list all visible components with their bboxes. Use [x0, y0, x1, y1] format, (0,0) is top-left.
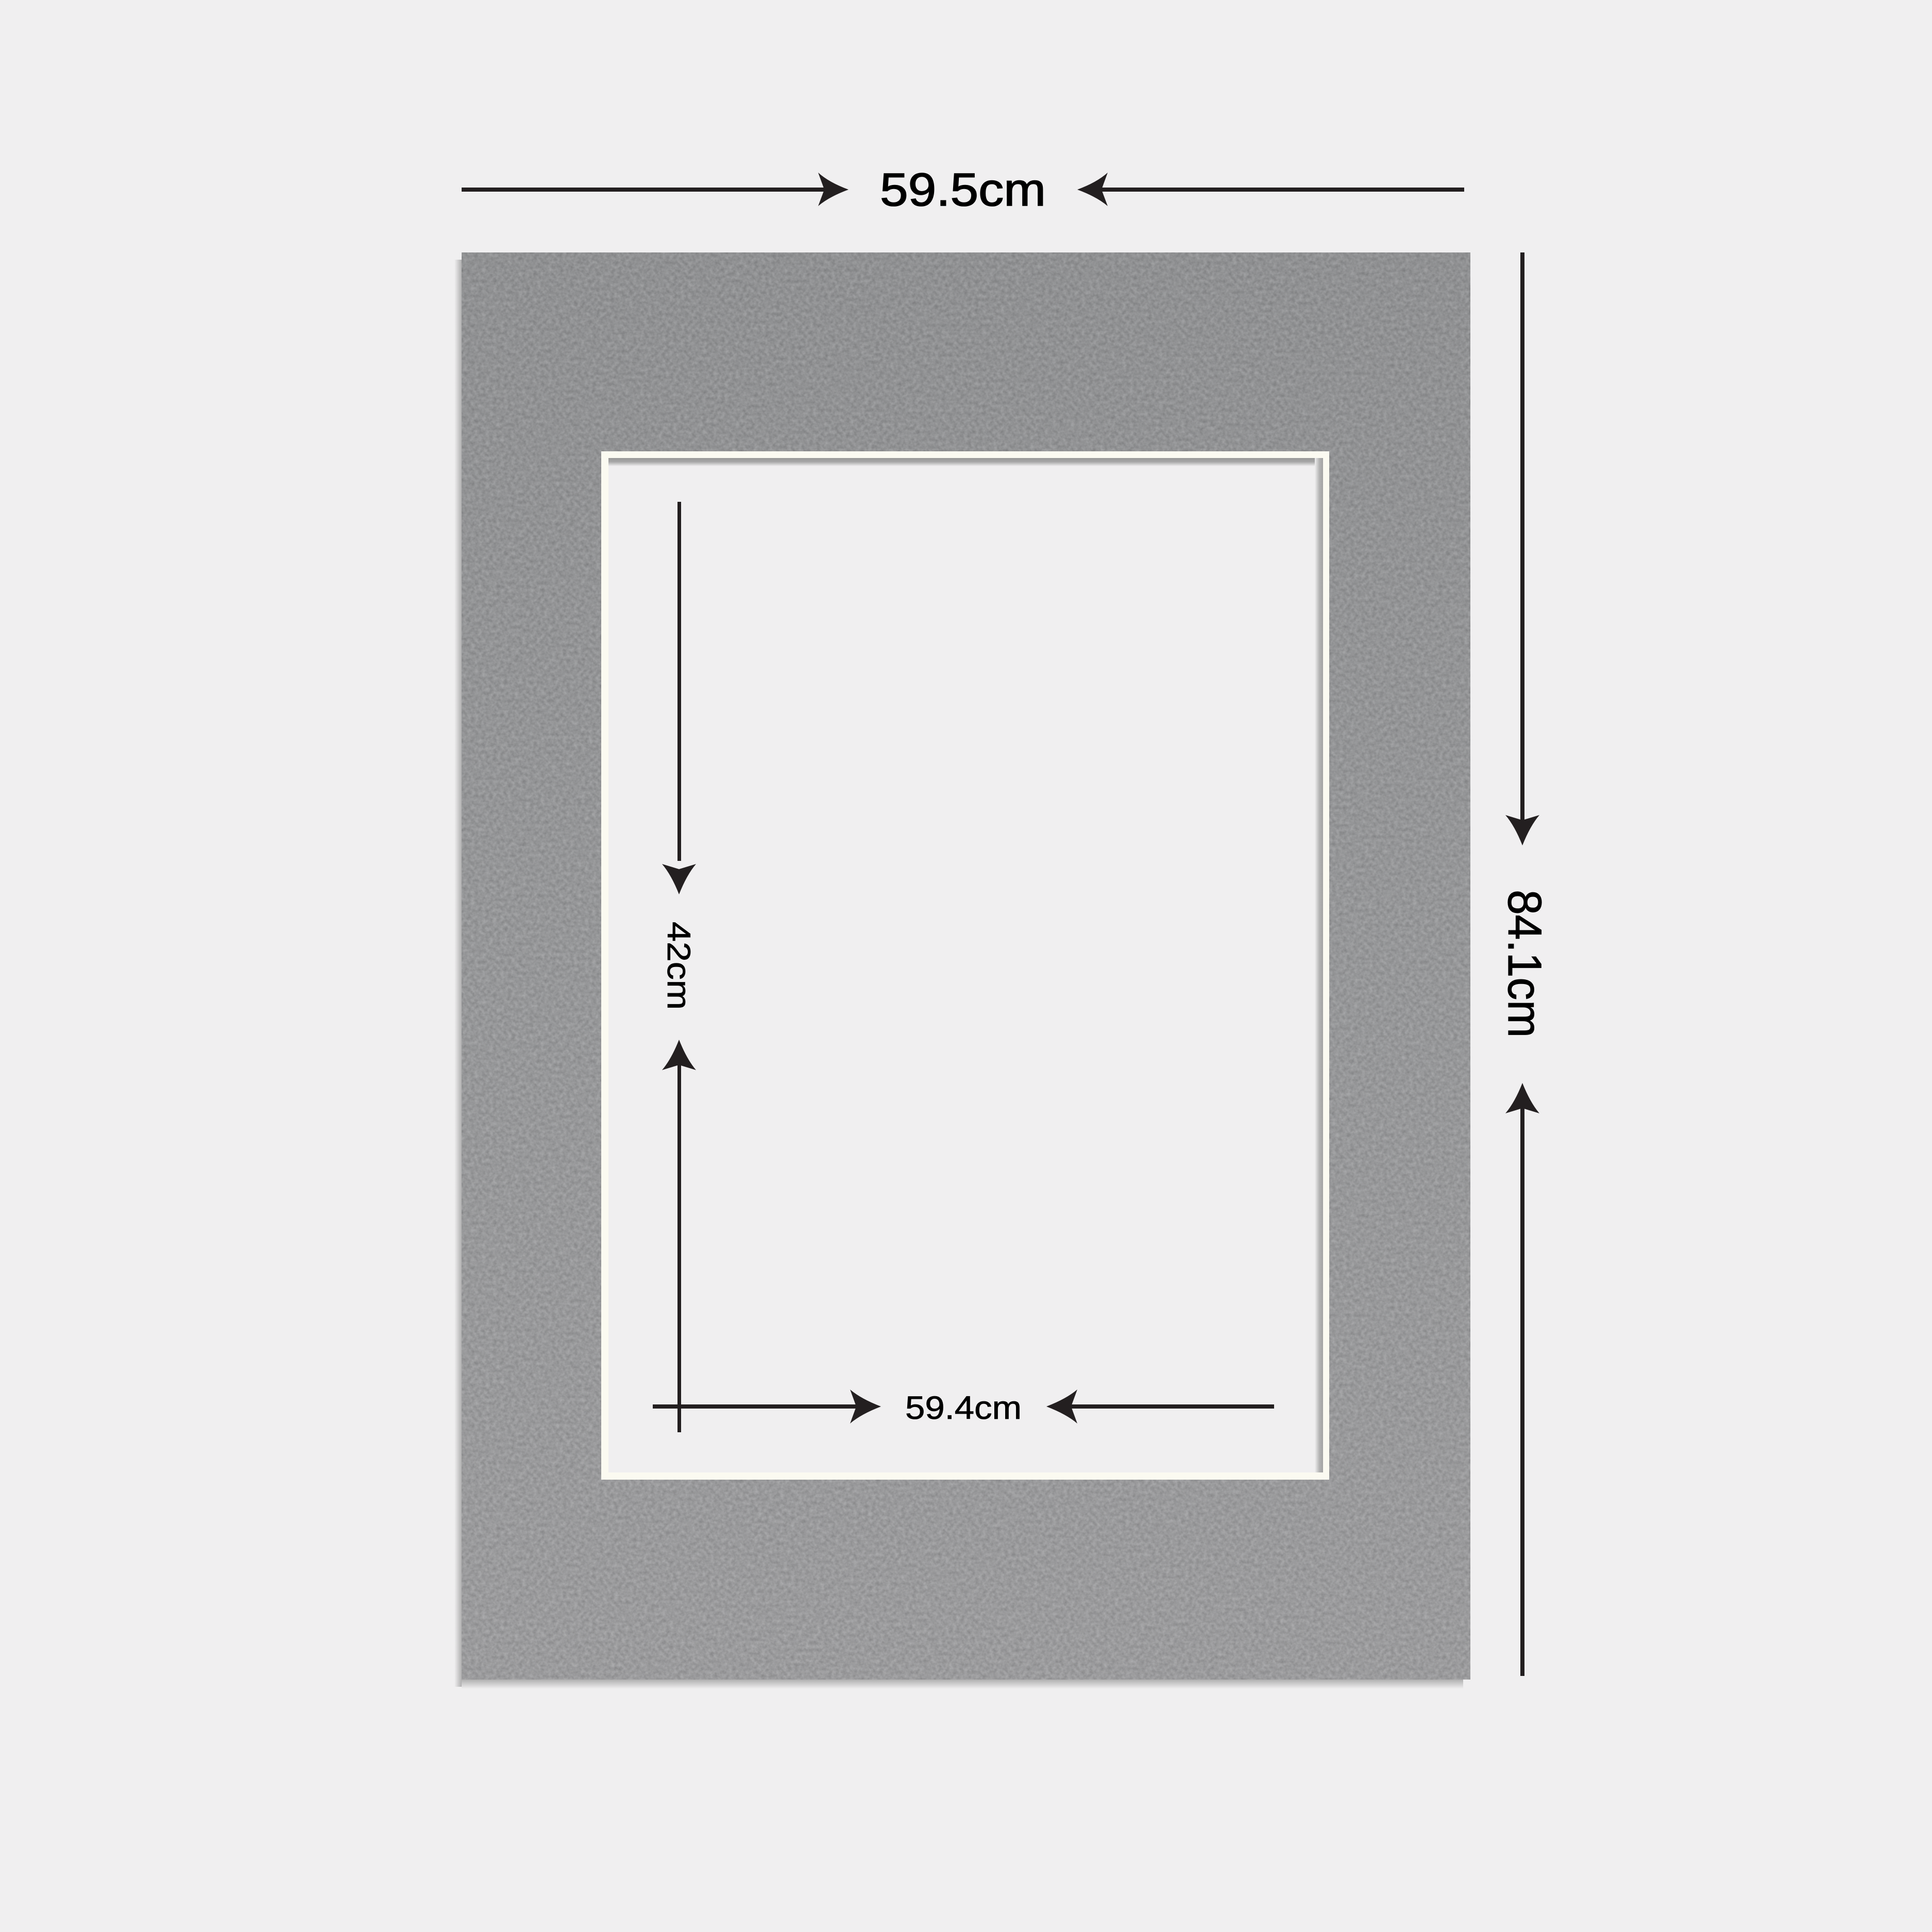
- aperture with cream bevel: [601, 451, 1329, 1480]
- label: 42cm: 42cm: [660, 922, 697, 1010]
- arrow: pointing up: [1505, 1083, 1539, 1676]
- label: 59.5cm: 59.5cm: [880, 164, 1046, 216]
- arrow: pointing right: [653, 1389, 881, 1423]
- label: 84.1cm: 84.1cm: [1498, 890, 1551, 1038]
- board drop shadow: [454, 260, 1463, 1689]
- arrow: pointing left: [1077, 173, 1464, 206]
- mount board: [454, 252, 1470, 1689]
- arrow: pointing down: [662, 502, 696, 894]
- arrow: pointing right: [462, 173, 849, 206]
- dimension: outer height 84.1cm: [1498, 252, 1551, 1676]
- dimension: aperture height 42cm: [660, 502, 697, 1432]
- label: 59.4cm: 59.4cm: [905, 1390, 1022, 1426]
- dimension: aperture width 59.4cm: [653, 1389, 1274, 1426]
- aperture inner shadow: [608, 458, 1323, 1472]
- dimension: outer width 59.5cm: [462, 164, 1464, 216]
- arrow: pointing down: [1505, 252, 1539, 845]
- arrow: pointing up: [662, 1040, 696, 1432]
- grey board surface: [462, 252, 1470, 1680]
- arrow: pointing left: [1046, 1389, 1274, 1423]
